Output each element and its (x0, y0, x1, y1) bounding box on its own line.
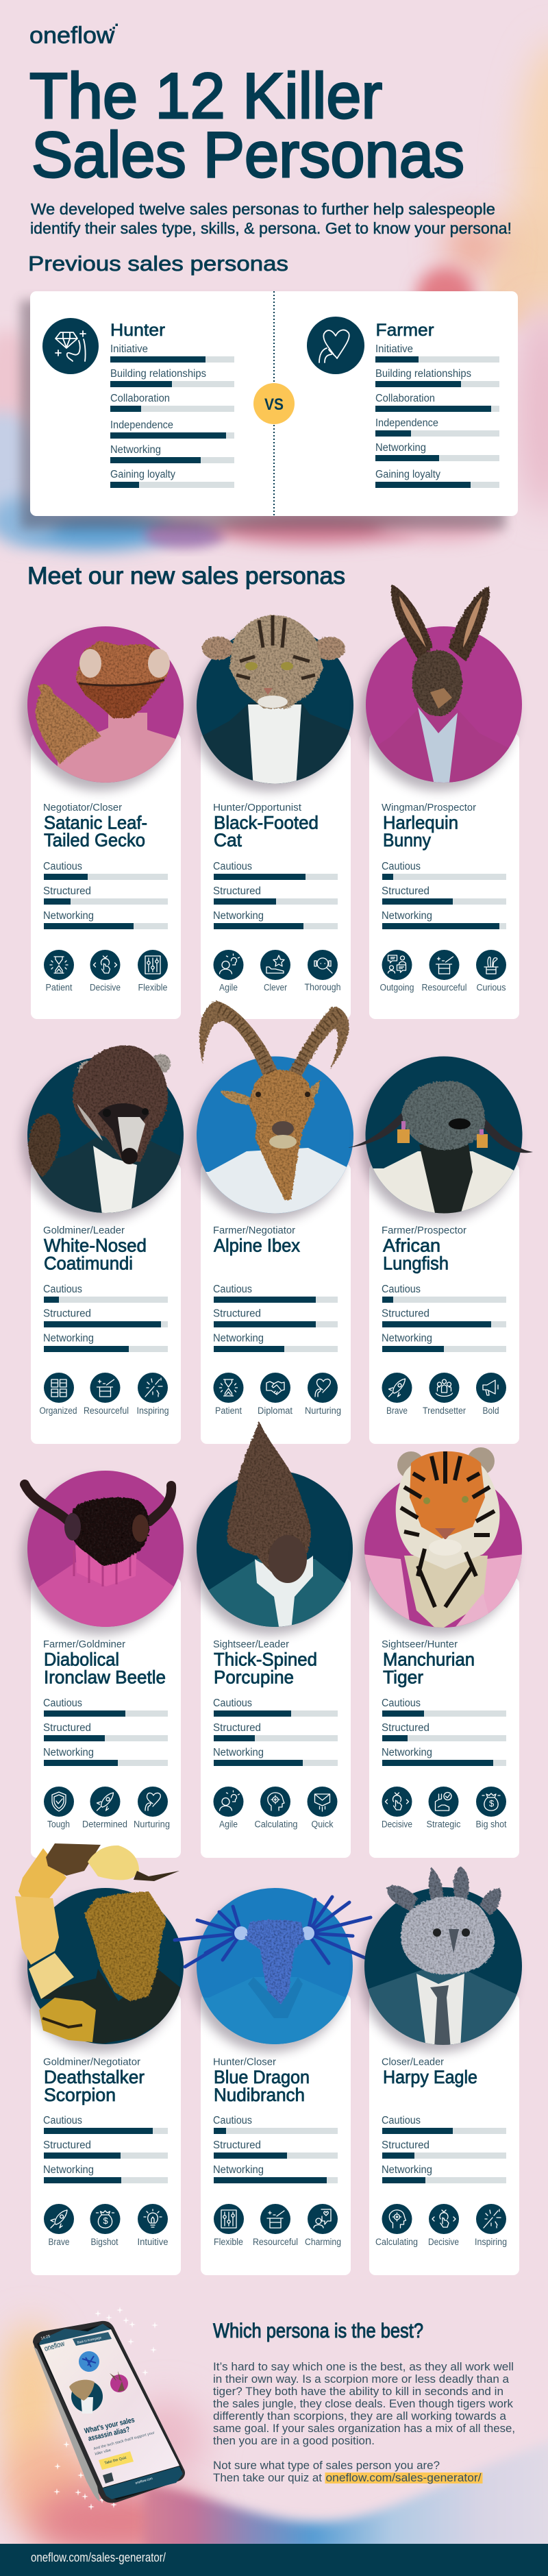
card: Black-Footed Cat (191, 615, 356, 1019)
trait icons: Bold (482, 1406, 499, 1416)
trait bars: Structured (43, 885, 91, 897)
role: Closer/Leader (382, 2056, 444, 2068)
trait icons: Organized (40, 1406, 77, 1416)
footer bar (0, 2544, 548, 2576)
portrait: tiger (360, 1447, 524, 1635)
farmer skill bars: Building relationships (375, 368, 471, 380)
text block: best persona explanation: tiger? They both have the ability to kill in seconds and in (213, 2385, 503, 2398)
trait icons (382, 1373, 506, 1416)
trait bars: Networking (213, 910, 264, 922)
phone headline (84, 2416, 137, 2444)
text block: best persona explanation: the sales jungle, they close deals. Even though tigers work (213, 2398, 514, 2410)
card: Thick-Spined Porcupine (191, 1421, 353, 1858)
trait bars: Structured (213, 885, 261, 897)
trait icons: Resourceful (84, 1406, 129, 1416)
farmer skill bars: Collaboration (375, 393, 435, 404)
name: Thick-Spined (214, 1649, 317, 1669)
name: White-Nosed (44, 1235, 147, 1255)
heading: which persona is best: Which persona is the best? (213, 2320, 423, 2342)
trait bars: Cautious (382, 1697, 421, 1709)
portrait: lungfish (348, 1057, 533, 1221)
name: Tailed Gecko (44, 830, 145, 850)
trait icons (214, 1373, 341, 1416)
role: Hunter/Closer (213, 2056, 276, 2068)
callout: quiz link: oneflow.com/sales-generator/ (326, 2472, 482, 2484)
trait icons: Agile (219, 1819, 238, 1830)
trait icons: Trendsetter (423, 1406, 466, 1416)
title: Sales Personas (32, 119, 464, 191)
trait icons (44, 2204, 169, 2247)
trait bars (382, 861, 506, 929)
trait icons: Nurturing (305, 1406, 341, 1416)
name: Bunny (383, 830, 431, 850)
phone quiz button: Take the Quiz (104, 2456, 127, 2466)
trait bars: Structured (213, 2139, 261, 2151)
trait bars: Networking (213, 1332, 264, 1345)
trait icons: Diplomat (258, 1406, 292, 1416)
farmer skill bars (375, 343, 499, 488)
portrait: nudibranch (175, 1888, 371, 2052)
icon: hunter diamond (42, 318, 99, 374)
role: Negotiator/Closer (43, 802, 122, 813)
farmer skill bars: Independence (375, 417, 438, 429)
trait icons: Decisive (428, 2237, 459, 2247)
role: Hunter/Opportunist (213, 802, 302, 813)
trait icons (44, 1787, 170, 1830)
name (44, 813, 147, 850)
trait bars: Cautious (382, 2115, 421, 2126)
portrait: porcupine (191, 1421, 353, 1635)
name: Nudibranch (214, 2085, 305, 2105)
trait icons: Flexible (138, 983, 167, 992)
trait bars: Networking (382, 1747, 432, 1758)
phone headline: What's your sales (84, 2416, 136, 2436)
heading: meet new personas: Meet our new sales personas (27, 563, 345, 589)
text block: best persona explanation: in their own way. Is a scorpion more or less deadly than a (213, 2373, 510, 2385)
trait bars (43, 1697, 168, 1766)
phone persona circle: cat (69, 2380, 103, 2414)
farmer skill bars: Networking (375, 442, 426, 454)
trait bars: Networking (382, 910, 432, 922)
name: Satanic Leaf- (44, 813, 147, 833)
intro text (30, 200, 512, 237)
trait icons: Tough (47, 1819, 70, 1830)
card: White-Nosed Coatimundi (22, 1045, 185, 1444)
trait icons: Calculating (255, 1819, 297, 1830)
trait icons: Flexible (214, 2237, 243, 2247)
hunter heading: Hunter (110, 321, 165, 340)
role: Farmer/Negotiator (213, 1225, 295, 1236)
card: Satanic Leaf-Tailed Gecko (22, 626, 186, 1019)
trait icons (44, 950, 168, 992)
trait icons: Resourceful (422, 983, 467, 992)
trait icons: Patient (215, 1406, 242, 1416)
intro text: identify their sales type, skills, & persona. Get to know your persona! (30, 219, 512, 237)
panel: previous personas comparison (21, 291, 518, 529)
farmer skill bars: Initiative (375, 343, 413, 355)
card: Harpy Eagle (360, 1866, 524, 2275)
trait icons: Curious (477, 983, 506, 992)
hunter skill bars: Building relationships (110, 368, 206, 380)
name (383, 813, 458, 850)
name: Black-Footed (214, 813, 319, 833)
phone persona circle: bunny (110, 2371, 128, 2392)
callout: quiz link: Not sure what type of sales person you are? (213, 2460, 440, 2472)
name: Blue Dragon (214, 2067, 310, 2087)
callout: quiz link: Then take our quiz at (213, 2472, 322, 2484)
trait icons (214, 2204, 341, 2247)
name: Tiger (383, 1667, 423, 1687)
role: Goldminer/Leader (43, 1225, 125, 1236)
trait bars: Cautious (213, 1284, 252, 1295)
card: Diabolical Ironclaw Beetle (22, 1471, 184, 1858)
callout: quiz link (213, 2460, 482, 2484)
card: Blue Dragon Nudibranch (175, 1888, 371, 2275)
name: African (383, 1235, 440, 1255)
trait bars: Structured (382, 2139, 429, 2151)
trait icons: Inspiring (137, 1406, 169, 1416)
hunter skill bars: Independence (110, 419, 173, 431)
trait icons: Determined (82, 1819, 127, 1830)
card: Alpine Ibex (191, 1001, 353, 1444)
VS badge (253, 383, 295, 424)
trait icons: Patient (45, 983, 73, 992)
trait bars (213, 2115, 338, 2183)
footer bar: oneflow.com/sales-generator/ (31, 2551, 166, 2564)
trait bars (43, 2115, 168, 2183)
name: Ironclaw Beetle (44, 1667, 166, 1687)
portrait: beetle (22, 1471, 184, 1635)
role: Sightseer/Hunter (382, 1639, 458, 1650)
intro text: We developed twelve sales personas to further help salespeople (31, 200, 495, 218)
trait icons: Strategic (426, 1819, 461, 1830)
name: Lungfish (383, 1253, 449, 1273)
trait icons: Decisive (382, 1819, 412, 1830)
name: Harpy Eagle (383, 2067, 477, 2087)
trait bars: Structured (43, 1308, 91, 1320)
role: Goldminer/Negotiator (43, 2056, 140, 2068)
trait bars: Cautious (43, 1697, 82, 1709)
trait bars: Cautious (43, 861, 82, 872)
trait icons: Outgoing (379, 983, 414, 992)
name: Porcupine (214, 1667, 294, 1687)
name (383, 1235, 449, 1273)
phone quiz button (99, 2451, 134, 2470)
trait bars: Networking (43, 1747, 94, 1758)
trait icons: Clever (264, 983, 287, 992)
trait bars (382, 1697, 506, 1766)
name: Manchurian (383, 1649, 475, 1669)
name: Coatimundi (44, 1253, 133, 1273)
trait icons: Quick (311, 1819, 334, 1830)
name: Cat (214, 830, 242, 850)
trait bars: Structured (43, 1722, 91, 1734)
trait icons: Brave (48, 2237, 70, 2247)
farmer heading: Farmer (375, 321, 434, 340)
trait icons: Resourceful (253, 2237, 298, 2247)
card: Harlequin Bunny (360, 585, 522, 1019)
hunter skill bars: Networking (110, 444, 161, 456)
trait bars: Networking (382, 2164, 432, 2176)
trait bars (382, 2115, 506, 2183)
phone subtext: killer vibe (95, 2449, 112, 2457)
hunter skill bars: Collaboration (110, 393, 170, 404)
trait bars (213, 1697, 338, 1766)
phone mockup (33, 2307, 185, 2510)
trait icons (214, 1787, 337, 1830)
name: Deathstalker (44, 2067, 145, 2087)
trait bars: Structured (213, 1722, 261, 1734)
trait bars: Cautious (382, 861, 421, 872)
trait bars (382, 1284, 506, 1352)
trait icons: Decisive (90, 983, 121, 992)
portrait: ibex (191, 1001, 353, 1221)
portrait: bunny (360, 585, 522, 791)
trait icons: Intuitive (137, 2237, 169, 2247)
trait icons (382, 1787, 507, 1830)
text block: best persona explanation (213, 2361, 515, 2447)
trait bars: Cautious (213, 2115, 252, 2126)
trait bars: Cautious (213, 1697, 252, 1709)
name (214, 1649, 317, 1687)
trait icons (375, 2204, 507, 2247)
phone back button text: Back to homepage (77, 2336, 102, 2345)
name (214, 813, 319, 850)
trait bars: Structured (43, 2139, 91, 2151)
role: Farmer/Goldminer (43, 1639, 125, 1650)
trait bars: Networking (213, 2164, 264, 2176)
phone status time: 14:25 (40, 2335, 51, 2341)
trait bars: Structured (213, 1308, 261, 1320)
trait icons: Agile (219, 983, 238, 992)
hunter skill bars: Initiative (110, 343, 148, 355)
logo: oneflow: oneflow (29, 23, 114, 49)
trait icons: Nurturing (134, 1819, 170, 1830)
phone subtext: And the tech stack that'll support your (93, 2431, 155, 2451)
card: African Lungfish (348, 1057, 533, 1444)
icon: farmer heart (307, 317, 364, 374)
name: Diabolical (44, 1649, 119, 1669)
trait icons: Calculating (375, 2237, 418, 2247)
trait icons: Inspiring (475, 2237, 507, 2247)
trait bars: Cautious (43, 2115, 82, 2126)
trait bars: Networking (43, 1332, 94, 1345)
trait bars (213, 861, 338, 929)
phone persona circle: nudibranch (79, 2351, 99, 2372)
trait icons: Thorough (304, 982, 341, 992)
hunter skill bars: Gaining loyalty (110, 469, 175, 480)
trait bars: Cautious (213, 861, 252, 872)
trait bars (43, 1284, 168, 1352)
hunter skill bars (110, 343, 234, 488)
portrait: eagle (360, 1866, 524, 2052)
trait icons: Bigshot (90, 2237, 119, 2247)
name (44, 2067, 145, 2105)
trait bars (43, 861, 168, 929)
trait bars: Networking (43, 910, 94, 922)
card: Deathstalker Scorpion (15, 1843, 184, 2275)
name: Scorpion (44, 2085, 116, 2105)
text block: best persona explanation: then you are in a good position. (213, 2435, 375, 2447)
text block: best persona explanation: It’s hard to say which one is the best, as they all work well (213, 2361, 514, 2373)
trait icons (379, 950, 506, 992)
farmer skill bars: Gaining loyalty (375, 469, 440, 480)
text block: best persona explanation: same goal. If your sales organization has a mix of all these, (213, 2422, 515, 2435)
trait bars: Networking (43, 2164, 94, 2176)
title: The 12 Killer (29, 60, 382, 132)
trait icons: Big shot (475, 1819, 507, 1830)
name (383, 1649, 475, 1687)
trait bars: Networking (213, 1747, 264, 1758)
trait bars: Networking (382, 1332, 432, 1345)
VS badge: VS (264, 395, 284, 414)
phone footer text: oneflow.com (135, 2477, 153, 2486)
name: Alpine Ibex (214, 1235, 300, 1255)
trait bars: Structured (382, 1308, 429, 1320)
heading: previous sales personas: Previous sales personas (28, 252, 288, 275)
trait bars: Cautious (382, 1284, 421, 1295)
text block: best persona explanation: differently than scorpions, they are all working towards a (213, 2410, 507, 2422)
trait bars (213, 1284, 338, 1352)
trait icons (40, 1373, 169, 1416)
portrait: cat (191, 615, 356, 792)
role: Farmer/Prospector (382, 1225, 466, 1236)
name (44, 1649, 166, 1687)
name (44, 1235, 147, 1273)
trait bars: Cautious (43, 1284, 82, 1295)
trait bars: Structured (382, 1722, 429, 1734)
trait bars: Structured (382, 885, 429, 897)
trait icons: Brave (386, 1406, 408, 1416)
name (214, 2067, 310, 2105)
portrait: gecko (22, 626, 186, 791)
phone headline: assassin alias? (88, 2425, 131, 2443)
portrait: scorpion (15, 1843, 184, 2052)
role: Sightseer/Leader (213, 1639, 289, 1650)
phone logo: oneflow (44, 2340, 66, 2353)
trait icons (214, 950, 341, 992)
role: Wingman/Prospector (382, 802, 476, 813)
portrait: coati (22, 1045, 185, 1221)
name: Harlequin (383, 813, 458, 833)
card: Manchurian Tiger (360, 1447, 524, 1858)
title (29, 60, 464, 191)
trait icons: Charming (305, 2237, 341, 2247)
